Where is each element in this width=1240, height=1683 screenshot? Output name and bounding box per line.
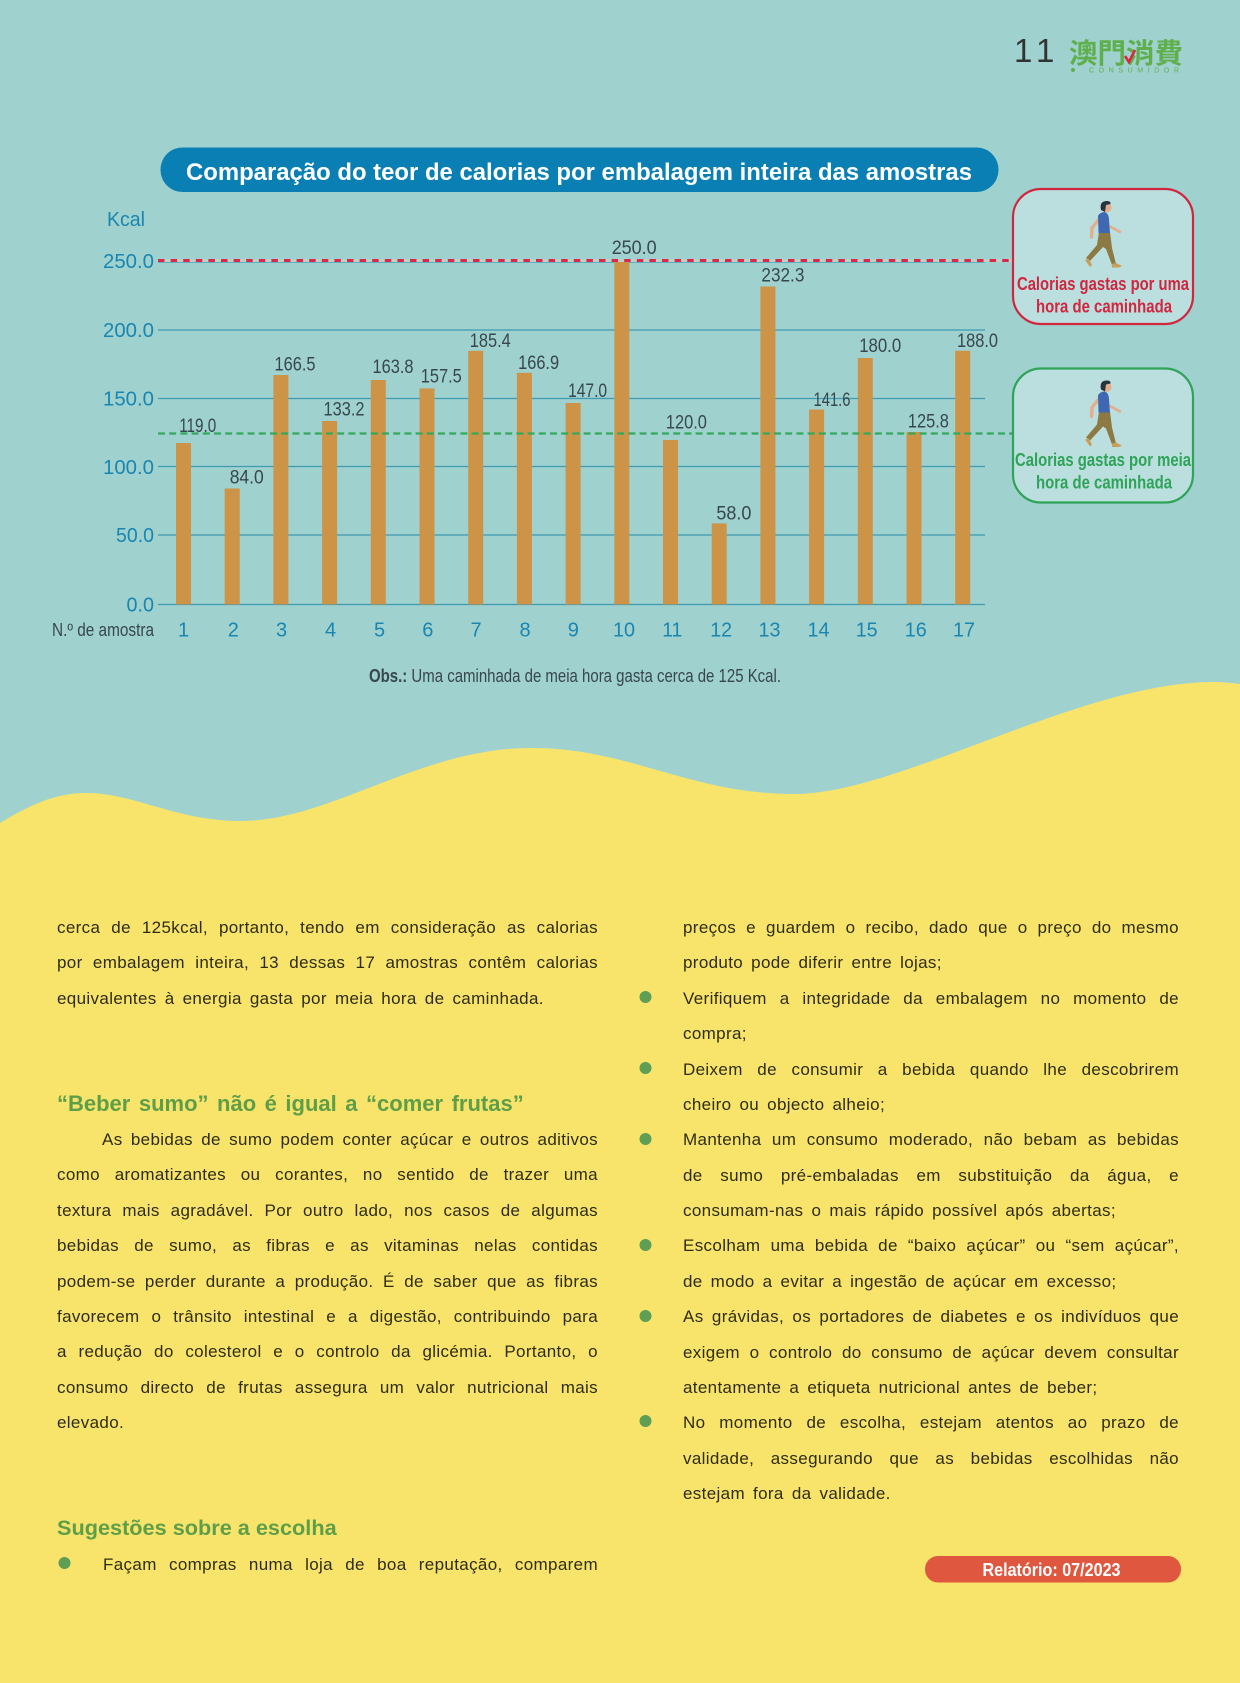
bullets: right column (640, 991, 652, 1427)
value labels: 125.8 (908, 411, 949, 433)
text block: juice paragraph: consumo directo de frutas assegura um valor nutricional mais (57, 1378, 598, 1397)
sample number axis: 16 (905, 620, 927, 642)
report date pill (925, 1556, 1181, 1582)
bar chart: calories per sample (52, 209, 1013, 642)
text block: first suggestion: Façam compras numa loja de boa reputação, comparem (103, 1555, 598, 1574)
text block: intro paragraph: equivalentes à energia gasta por meia hora de caminhada. (57, 989, 544, 1008)
text block: suggestions list: Mantenha um consumo moderado, não bebam as bebidas (683, 1130, 1179, 1149)
value labels: 188.0 (957, 330, 998, 352)
text block: suggestions list: exigem o controlo do consumo de açúcar devem consultar (683, 1342, 1179, 1362)
y axis labels (103, 209, 154, 616)
text block: juice paragraph: textura mais agradável. Por outro lado, nos casos de algumas (57, 1201, 598, 1220)
bullets: left column (58, 1557, 70, 1569)
value labels: 163.8 (372, 356, 414, 378)
sample number axis: 11 (662, 620, 682, 642)
sample number axis (178, 620, 975, 642)
y axis labels: 150.0 (103, 388, 154, 410)
text block: intro paragraph: cerca de 125kcal, portanto, tendo em consideração as calorias (57, 918, 598, 937)
text block: suggestions list: de sumo pré-embaladas em substituição da água, e (683, 1166, 1179, 1185)
value labels: 119.0 (179, 415, 216, 437)
text block: suggestions list: de modo a evitar a ingestão de açúcar em excesso; (683, 1272, 1116, 1291)
y axis labels: 100.0 (103, 457, 154, 479)
text block: suggestions list: Verifiquem a integridade da embalagem no momento de (683, 989, 1179, 1008)
text block: juice paragraph: bebidas de sumo, as fibras e as vitaminas nelas contidas (57, 1236, 598, 1255)
chart title pill: Comparação do teor de calorias por embalagem inteira das amostras (186, 159, 972, 186)
red reference line (158, 259, 1013, 262)
sample number axis: 17 (953, 620, 975, 642)
y axis labels: 200.0 (103, 320, 154, 342)
logo: O Consumidor: 澳門消費 (1069, 32, 1183, 72)
text block: juice paragraph: elevado. (57, 1413, 124, 1432)
sample number axis: 15 (856, 620, 878, 642)
text block: juice paragraph (57, 1130, 598, 1432)
callout: half hour walk (1013, 368, 1193, 502)
icon: walking person (1085, 380, 1122, 447)
y axis labels: Kcal (107, 209, 145, 231)
yellow wave background (0, 682, 1240, 1683)
text block: suggestions list: consumam-nas o mais rápido possível após abertas; (683, 1201, 1116, 1220)
value labels: 141.6 (814, 389, 850, 411)
y axis labels: 50.0 (116, 525, 154, 547)
sample number axis: 5 (374, 620, 385, 642)
text block: suggestions list: No momento de escolha, estejam atentos ao prazo de (683, 1413, 1179, 1432)
text block: suggestions list: Deixem de consumir a bebida quando lhe descobrirem (683, 1060, 1179, 1078)
text block: suggestions list: produto pode diferir entre lojas; (683, 953, 942, 972)
icon: walking person (1085, 201, 1122, 268)
callout text: Calorias gastas por uma (1017, 273, 1190, 294)
value labels: 166.9 (518, 352, 559, 374)
sample number axis: 8 (519, 620, 531, 642)
sample number axis: 2 (228, 620, 239, 642)
green reference line (158, 432, 1013, 435)
callout: one hour walk (1013, 189, 1193, 324)
callout text: Calorias gastas por meia (1015, 449, 1192, 470)
sample number axis: 3 (276, 620, 287, 642)
value labels (179, 237, 998, 524)
text block: intro paragraph: por embalagem inteira, 13 dessas 17 amostras contêm calorias (57, 953, 598, 972)
callout text: hora de caminhada (1036, 296, 1173, 316)
text block: suggestions list: Escolham uma bebida de “baixo açúcar” ou “sem açúcar”, (683, 1236, 1179, 1255)
callout text (1017, 273, 1190, 316)
report date pill: Relatório: 07/2023 (982, 1560, 1120, 1580)
chart note: Obs.: Uma caminhada de meia hora gasta cerca de 125 Kcal. (369, 666, 781, 686)
text block: suggestions list: preços e guardem o recibo, dado que o preço do mesmo (683, 918, 1179, 937)
text block: suggestions list: cheiro ou objecto alheio; (683, 1095, 885, 1114)
bars (176, 261, 970, 604)
text block: juice paragraph: podem-se perder durante a produção. É de saber que as fibras (57, 1272, 598, 1290)
value labels: 120.0 (666, 412, 707, 434)
callout text (1015, 449, 1192, 492)
value labels: 84.0 (230, 467, 264, 489)
text block: juice paragraph: a redução do colesterol e o controlo da glicémia. Portanto, o (57, 1342, 598, 1361)
sample number axis: 13 (758, 620, 780, 642)
text block: juice paragraph: favorecem o trânsito intestinal e a digestão, contribuindo para (57, 1307, 598, 1326)
value labels: 250.0 (612, 237, 657, 259)
heading: sugestoes: Sugestões sobre a escolha (57, 1515, 337, 1540)
text block: suggestions list: compra; (683, 1024, 747, 1043)
value labels: 157.5 (421, 366, 462, 388)
text block: suggestions list: estejam fora da validade. (683, 1484, 891, 1503)
sample number axis: 1 (178, 620, 189, 642)
value labels: 133.2 (324, 399, 364, 421)
value labels: 180.0 (859, 335, 901, 357)
text block: suggestions list: validade, assegurando que as bebidas escolhidas não (683, 1449, 1179, 1468)
heading: beber sumo: “Beber sumo” não é igual a “comer frutas” (57, 1091, 524, 1116)
y axis labels: 250.0 (103, 251, 154, 273)
sample number axis: 7 (470, 620, 482, 642)
value labels: 58.0 (716, 502, 752, 524)
sample number axis: 9 (568, 620, 579, 642)
sample number axis: 6 (422, 620, 433, 642)
callout text: hora de caminhada (1036, 472, 1173, 492)
text block: suggestions list: atentamente a etiqueta nutricional antes de beber; (683, 1378, 1098, 1397)
page number: 11 (1014, 32, 1054, 69)
chart title pill (160, 148, 998, 192)
value labels: 232.3 (761, 265, 804, 287)
text block: intro paragraph (57, 918, 598, 1008)
value labels: 147.0 (568, 380, 607, 402)
value labels: 185.4 (470, 330, 511, 352)
sample number axis: 10 (613, 620, 635, 642)
sample number axis: 14 (808, 620, 830, 642)
logo: O Consumidor: CONSUMIDOR (1089, 68, 1179, 74)
y axis labels: 0.0 (126, 594, 154, 616)
value labels: 166.5 (274, 354, 316, 376)
sample number axis: 4 (325, 620, 336, 642)
x axis label: N.º de amostra (52, 620, 155, 640)
text block: suggestions list: As grávidas, os portadores de diabetes e os indivíduos que (683, 1307, 1179, 1326)
text block: juice paragraph: como aromatizantes ou corantes, no sentido de trazer uma (57, 1165, 598, 1184)
sample number axis: 12 (710, 620, 732, 642)
text block: suggestions list (683, 918, 1179, 1503)
text block: juice paragraph: As bebidas de sumo podem conter açúcar e outros aditivos (102, 1130, 598, 1149)
